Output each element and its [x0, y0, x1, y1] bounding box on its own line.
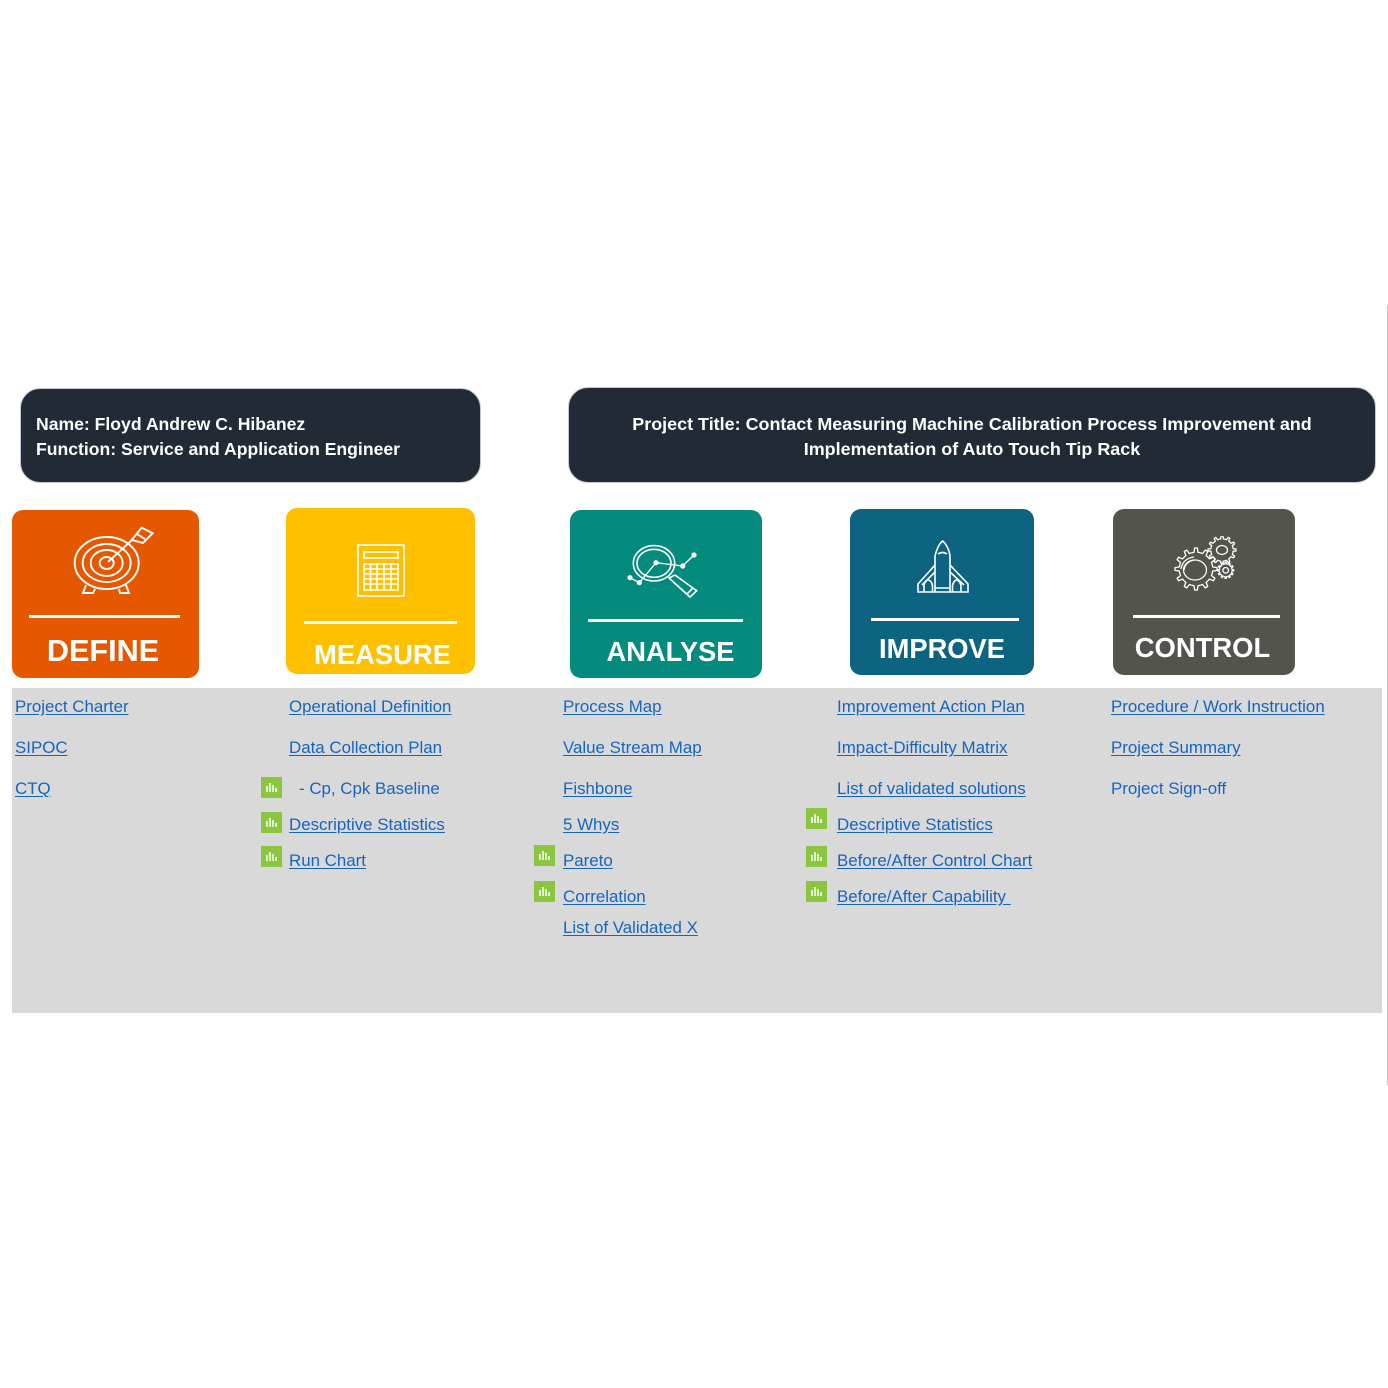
link: Improvement Action Plan	[837, 697, 1025, 716]
link: List of validated solutions	[837, 779, 1026, 798]
label: IMPROVE	[879, 633, 1005, 664]
icon: chart	[806, 846, 827, 867]
label: MEASURE	[314, 639, 451, 670]
label: ANALYSE	[607, 636, 734, 667]
link: SIPOC	[15, 738, 68, 757]
divider rule	[29, 615, 180, 618]
link: 5 Whys	[563, 815, 619, 834]
link: Descriptive Statistics	[289, 815, 445, 834]
link: Fishbone	[563, 779, 632, 798]
panel: deliverables	[12, 688, 1382, 1013]
link: Value Stream Map	[563, 738, 702, 757]
link: Procedure / Work Instruction	[1111, 697, 1325, 716]
icon: chart	[261, 846, 282, 867]
icon: target with arrow	[74, 526, 154, 594]
link: Run Chart	[289, 851, 366, 870]
name and function box	[20, 388, 481, 483]
link: Descriptive Statistics	[837, 815, 993, 834]
card: measure	[286, 508, 475, 674]
icon: calculator	[357, 544, 405, 597]
column: measure links	[289, 697, 452, 870]
divider rule	[304, 621, 457, 624]
icon: magnifier over line chart	[627, 544, 698, 598]
link: Data Collection Plan	[289, 738, 442, 757]
icon: chart	[534, 881, 555, 902]
link: Before/After Capability	[837, 887, 1006, 906]
divider rule	[871, 618, 1019, 621]
icon: chart	[261, 777, 282, 798]
card: improve	[850, 509, 1034, 675]
project title box	[568, 387, 1376, 483]
text: Project Sign-off	[1111, 779, 1226, 798]
label: CONTROL	[1135, 632, 1270, 663]
icon: chart	[806, 808, 827, 829]
text: - Cp, Cpk Baseline	[299, 779, 440, 798]
project title box: Implementation of Auto Touch Tip Rack	[804, 439, 1140, 459]
icon: chart	[534, 845, 555, 866]
card: analyse	[570, 510, 762, 678]
icon: chart	[261, 812, 282, 833]
card: define	[12, 510, 199, 678]
icon: gears	[1174, 536, 1237, 591]
link: CTQ	[15, 779, 51, 798]
link: List of Validated X	[563, 918, 698, 937]
divider rule	[1133, 615, 1280, 618]
column: improve links	[837, 697, 1032, 906]
link: Process Map	[563, 697, 662, 716]
link: Project Summary	[1111, 738, 1241, 757]
link: Correlation	[563, 887, 646, 906]
card: control	[1113, 509, 1295, 675]
label: DEFINE	[47, 634, 159, 668]
column: define links	[15, 697, 129, 798]
divider rule	[588, 619, 743, 622]
link: Impact-Difficulty Matrix	[837, 738, 1008, 757]
name and function box: Function: Service and Application Engineer	[36, 439, 400, 459]
link: Before/After Control Chart	[837, 851, 1032, 870]
name and function box: Name: Floyd Andrew C. Hibanez	[36, 414, 305, 434]
right edge line	[1387, 305, 1388, 1085]
link: Project Charter	[15, 697, 129, 716]
link: Pareto	[563, 851, 613, 870]
column: control links	[1111, 697, 1325, 798]
project title box: Project Title: Contact Measuring Machine Calibration Process Improvement and	[632, 414, 1312, 434]
icon: chart	[806, 881, 827, 902]
link: Operational Definition	[289, 697, 451, 716]
column: analyse links	[563, 697, 702, 937]
icon: space shuttle	[917, 540, 969, 593]
